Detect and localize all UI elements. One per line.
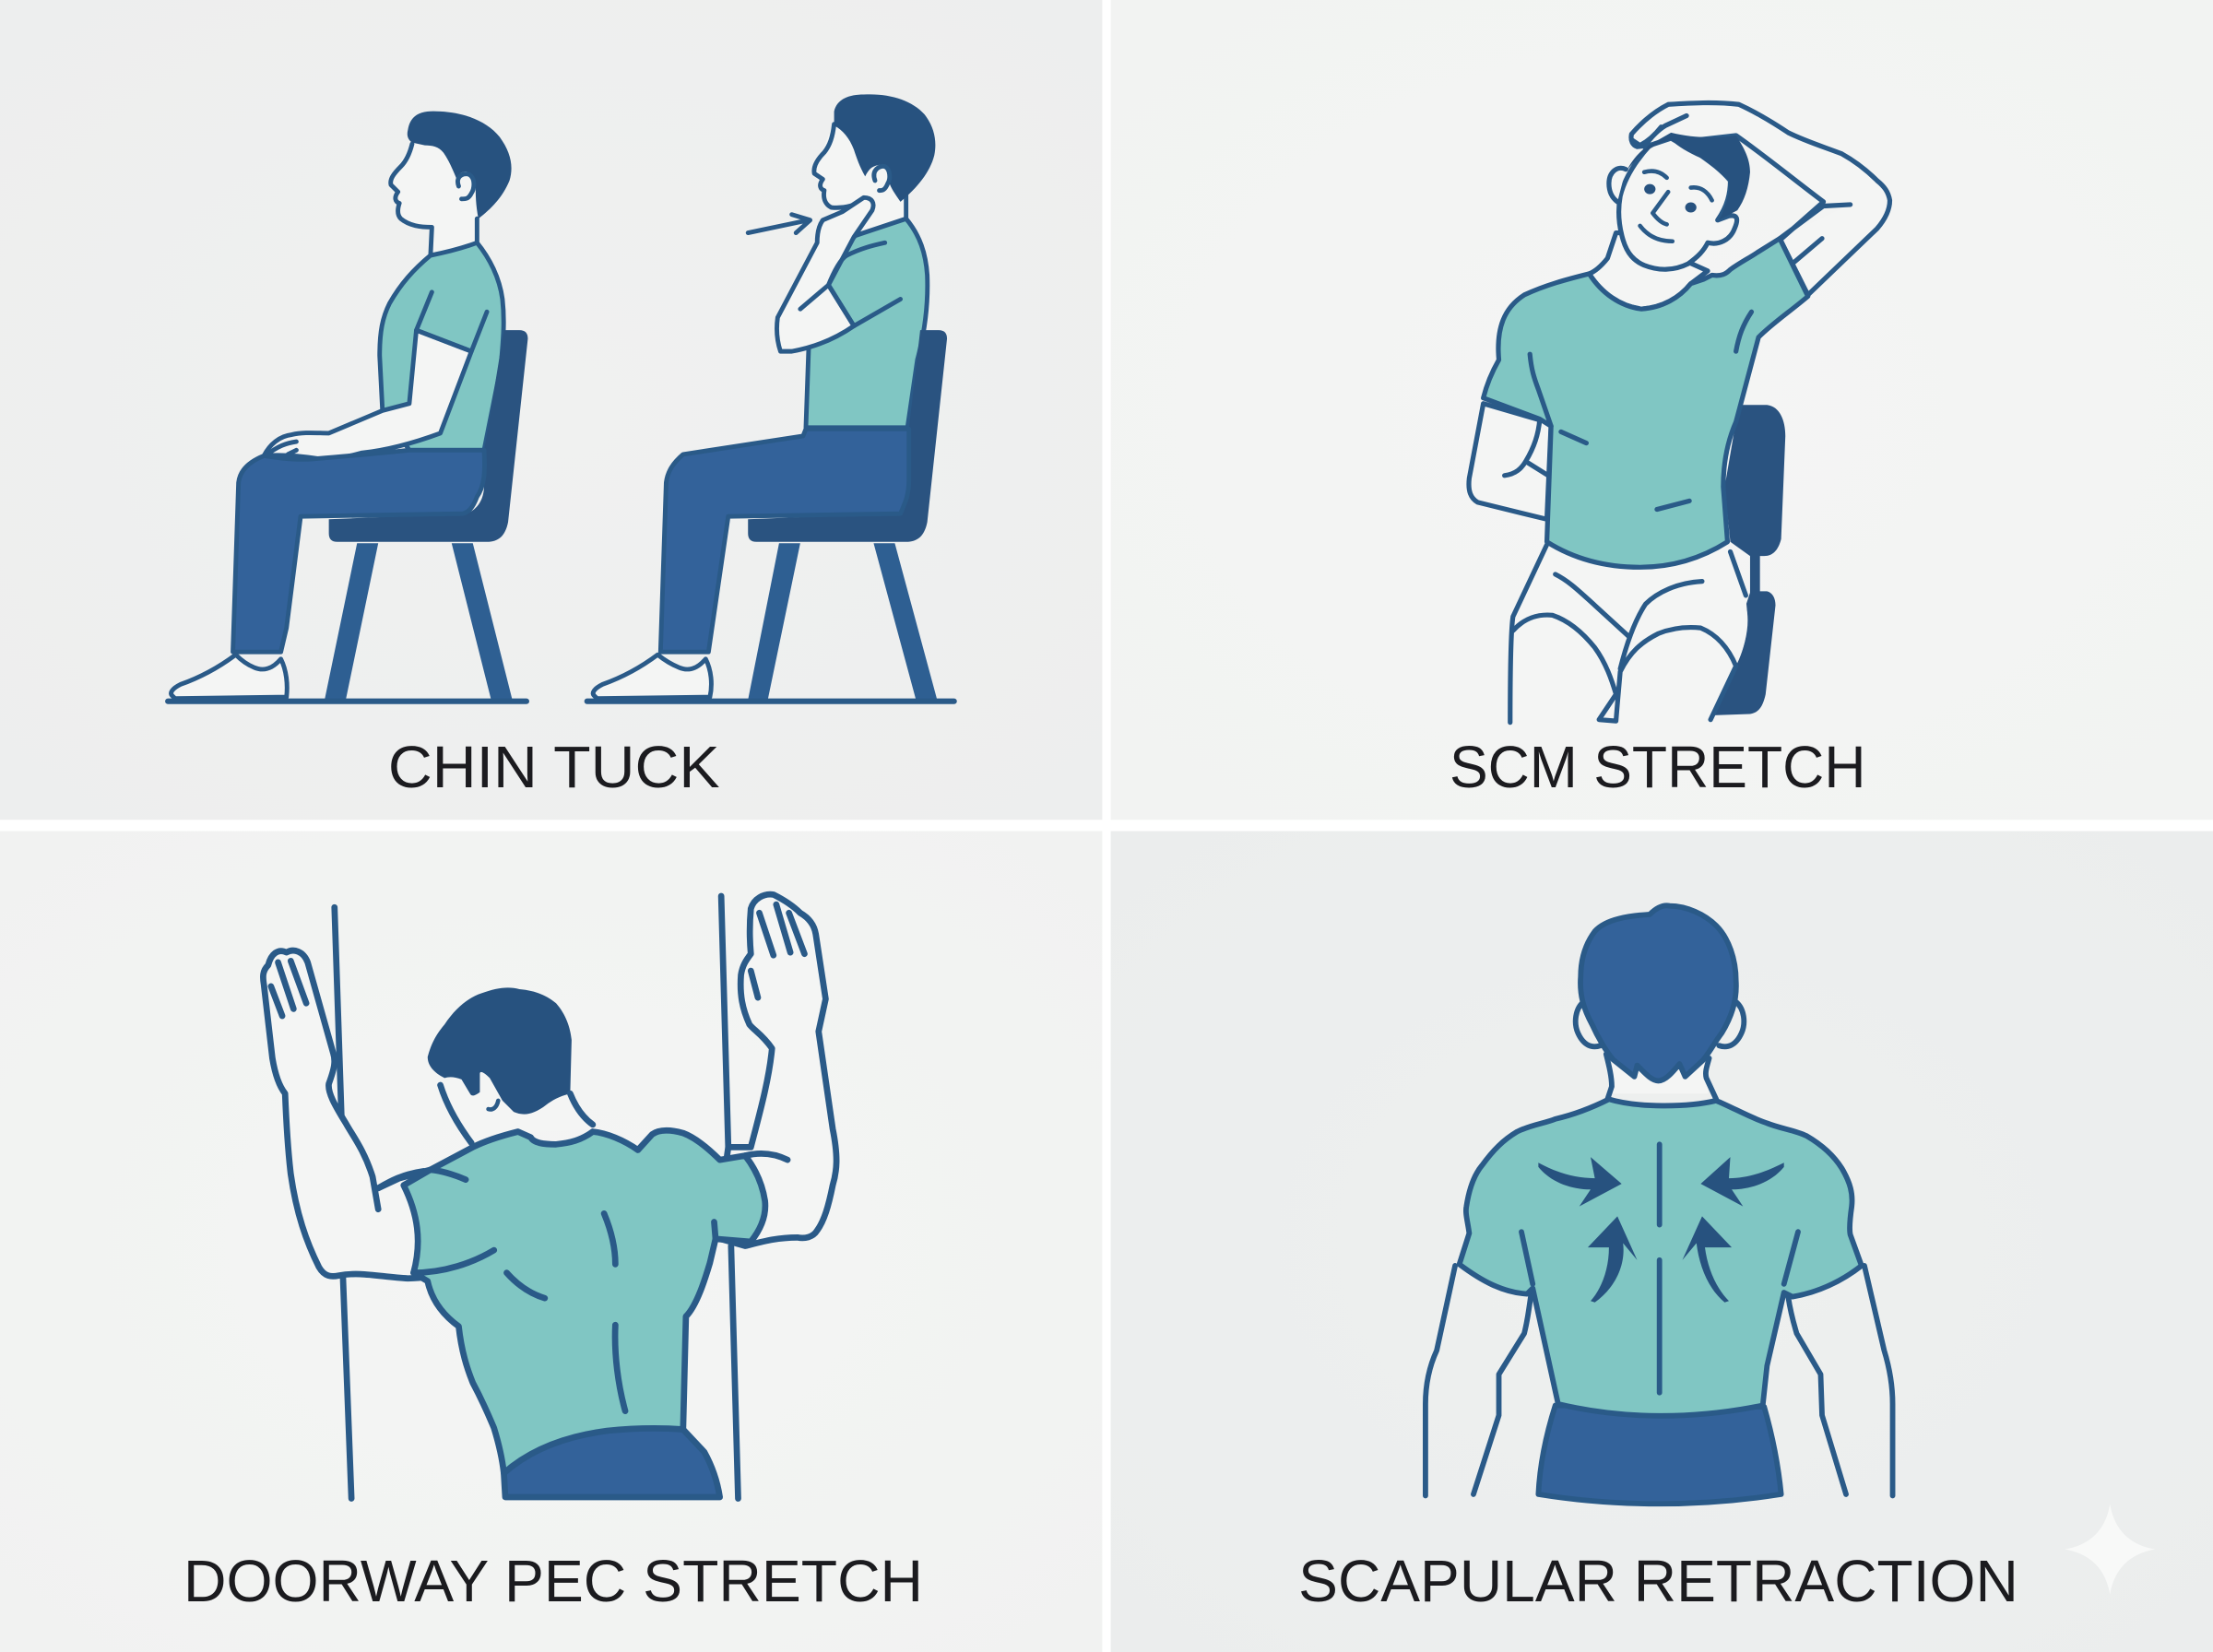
panel: chin tuck [0, 0, 1102, 820]
figure: upper back with arrows [1426, 905, 1893, 1504]
icon: sparkle watermark [2065, 1504, 2155, 1595]
panel: scapular retraction [1111, 832, 2213, 1652]
figure: seated chin tuck posture [587, 94, 954, 702]
label: chin tuck: CHIN TUCK [388, 734, 720, 800]
figure: seated neutral posture [168, 112, 527, 702]
panel: scm stretch [1111, 0, 2213, 820]
label: doorway pec stretch: DOORWAY PEC STRETCH [183, 1548, 923, 1614]
panel: doorway pec stretch [0, 832, 1102, 1652]
figure: seated neck side stretch [1469, 103, 1889, 723]
figure: doorway stretch from behind [263, 894, 836, 1499]
label: scapular retraction: SCAPULAR RETRACTION [1298, 1548, 2018, 1614]
label: scm stretch: SCM STRETCH [1450, 734, 1865, 800]
